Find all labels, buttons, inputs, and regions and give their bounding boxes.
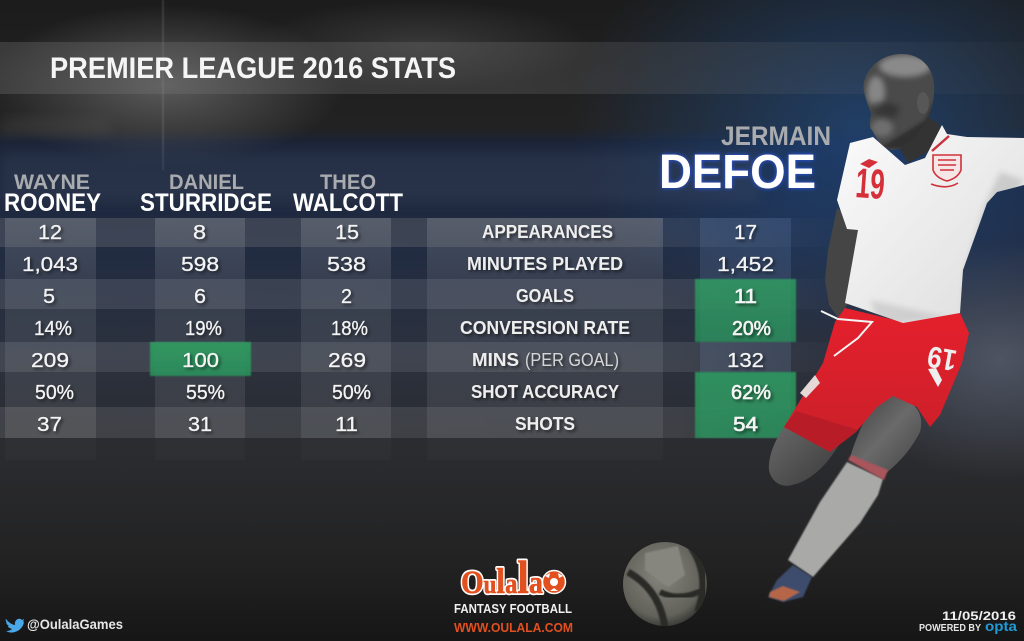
logo wordmark outline: Oulala — [461, 552, 543, 604]
umbro logo on shorts — [928, 368, 942, 387]
stats column: Defoe: 62% — [731, 382, 771, 404]
stats column: Rooney — [22, 222, 78, 436]
stats column: Defoe: 132 — [727, 350, 764, 372]
stats column: Rooney: 50% — [35, 382, 74, 404]
left arm — [825, 208, 860, 318]
stats column: Defoe: 54 — [733, 414, 758, 436]
crest — [933, 155, 961, 181]
stats column: Walcott: 15 — [335, 222, 359, 244]
shorts badge — [800, 375, 820, 398]
football — [623, 542, 707, 628]
twitter handle — [6, 617, 123, 633]
player heading: Rooney: WAYNE — [14, 171, 90, 194]
stats column: Sturridge: 6 — [194, 286, 206, 308]
player heading: Defoe: DEFOE — [659, 146, 816, 199]
shorts number: 19 — [925, 339, 959, 377]
stats column: Rooney: 5 — [43, 286, 55, 308]
player heading: Rooney: ROONEY — [4, 189, 101, 217]
player heading: Sturridge: STURRIDGE — [140, 189, 272, 217]
shirt number: 19 — [854, 159, 886, 208]
green highlight: Defoe goals and conversion rate — [695, 279, 796, 342]
stats column: Walcott: 11 — [335, 414, 358, 436]
shirt folds — [870, 172, 1024, 325]
logo wordmark: Oulala — [461, 552, 543, 604]
stats column: Defoe: 11 — [734, 286, 757, 308]
player heading: Walcott: WALCOTT — [293, 189, 403, 217]
neck — [895, 115, 940, 163]
stats column: Sturridge: 100 — [182, 350, 219, 372]
stats column: Walcott: 538 — [327, 254, 366, 276]
player heading: Rooney — [4, 171, 101, 217]
handle text: @OulalaGames — [27, 617, 123, 632]
player heading: Defoe — [659, 121, 831, 199]
stat labels: MINUTES PLAYED — [467, 254, 623, 274]
green highlight: Defoe shot accuracy and shots — [695, 372, 796, 438]
sock — [788, 462, 883, 577]
opta: opta — [985, 618, 1017, 634]
stats column: Walcott: 50% — [332, 382, 371, 404]
stats column: Sturridge: 8 — [193, 222, 206, 244]
player heading: Defoe: JERMAIN — [721, 121, 831, 151]
player heading: Walcott — [293, 171, 403, 217]
shorts — [784, 308, 969, 452]
boot — [768, 565, 812, 602]
stats column: Rooney: 14% — [34, 318, 72, 340]
stats column: Rooney: 12 — [38, 222, 62, 244]
stats column: Rooney: 37 — [37, 414, 62, 436]
stats column: Walcott: 18% — [331, 318, 368, 340]
stats column: Walcott — [327, 222, 371, 436]
stats column: Sturridge: 31 — [188, 414, 212, 436]
stats column: Defoe: 20% — [732, 318, 771, 340]
shirt — [837, 125, 1024, 323]
stat labels — [460, 222, 630, 434]
player figure: Defoe — [768, 50, 1024, 602]
stat labels: APPEARANCES — [482, 222, 613, 242]
website: WWW.OULALA.COM — [454, 620, 573, 635]
table backdrop rows and columns — [0, 218, 850, 460]
fantasy football: FANTASY FOOTBALL — [454, 601, 572, 616]
stat labels: MINS — [472, 350, 519, 370]
stat labels: SHOT ACCURACY — [471, 382, 619, 402]
title band — [0, 42, 1024, 94]
green highlight: Sturridge mins per goal — [150, 342, 251, 376]
stats column: Defoe: 1,452 — [717, 254, 774, 276]
icon: twitter bird — [6, 619, 24, 633]
stats column: Walcott: 269 — [328, 350, 366, 372]
stats column: Walcott: 2 — [341, 286, 352, 308]
player heading: Walcott: THEO — [320, 171, 376, 194]
shirt hem strings — [821, 311, 872, 356]
back thigh — [769, 424, 838, 486]
stats column: Sturridge: 55% — [186, 382, 225, 404]
powered by: POWERED BY — [919, 623, 981, 634]
title: PREMIER LEAGUE 2016 STATS — [50, 52, 456, 85]
logo: Oulala fantasy football — [454, 552, 573, 635]
logo football — [542, 570, 566, 594]
stats column: Defoe: 17 — [734, 222, 757, 244]
player heading: Sturridge — [140, 171, 272, 217]
front leg and knee — [850, 396, 921, 473]
umbro logo on shirt — [860, 159, 878, 168]
ear — [917, 92, 929, 114]
stat labels: SHOTS — [515, 414, 575, 434]
stats column: Sturridge — [181, 222, 225, 436]
stats column: Rooney: 1,043 — [22, 254, 78, 276]
stat labels: GOALS — [516, 286, 574, 306]
stat labels: CONVERSION RATE — [460, 318, 630, 338]
sock band — [848, 455, 888, 480]
collar — [932, 136, 949, 151]
stats column: Sturridge: 598 — [181, 254, 219, 276]
shorts hem — [784, 411, 858, 452]
date and powered by opta — [919, 609, 1017, 634]
player heading: Sturridge: DANIEL — [169, 171, 244, 194]
stats column: Defoe — [717, 222, 774, 436]
stats column: Rooney: 209 — [31, 350, 69, 372]
head — [864, 54, 934, 150]
stat labels: (PER GOAL) — [525, 350, 619, 370]
date: 11/05/2016 — [942, 609, 1016, 623]
stats column: Sturridge: 19% — [185, 318, 222, 340]
